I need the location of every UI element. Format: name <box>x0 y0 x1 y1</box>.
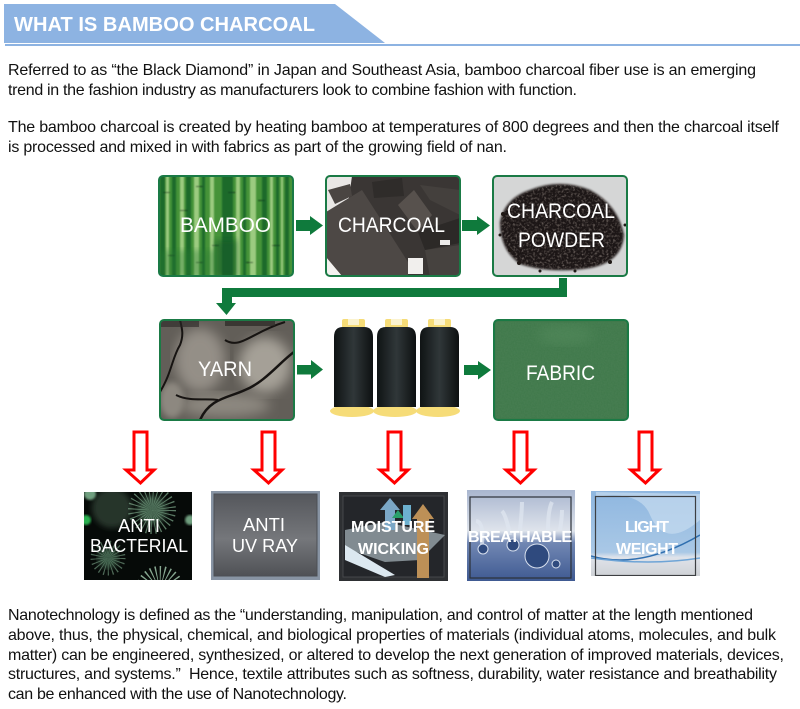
panel: anti uv ray <box>211 491 320 580</box>
panel: yarn <box>159 319 295 421</box>
label: light weight <box>616 519 678 558</box>
label: light weight: LIGHT <box>625 519 669 536</box>
label: anti uv ray <box>232 515 298 556</box>
intro paragraph two: is processed and mixed in with fabrics as part of the growing field of nan. <box>8 139 507 156</box>
intro paragraph one <box>8 62 756 99</box>
panel: anti bacterial <box>84 492 192 580</box>
closing paragraph: structures, and systems.” Hence, textile attributes such as softness, durability, water resistance and breathability <box>8 666 777 683</box>
panel: breathable <box>467 490 575 581</box>
label: moisture wicking: MOISTURE <box>351 519 435 536</box>
panel: charcoal <box>325 175 461 277</box>
intro paragraph one: Referred to as “the Black Diamond” in Japan and Southeast Asia, bamboo charcoal fiber use is an emerging <box>8 62 756 79</box>
arrow: red down arrows <box>126 432 659 483</box>
label: bamboo: BAMBOO <box>180 214 271 237</box>
closing paragraph: matter) can be engineered, synthesized, or altered to develop the next generation of improved materials, devices, <box>8 647 784 664</box>
panel: charcoal powder <box>492 175 628 277</box>
intro paragraph one: trend in the fashion industry as manufacturers look to combine fashion with function. <box>8 82 577 99</box>
title banner <box>4 4 800 46</box>
panel: moisture wicking <box>339 492 448 581</box>
closing paragraph: Nanotechnology is defined as the “understanding, manipulation, and control of matter at the length mentioned <box>8 607 753 624</box>
label: charcoal powder: POWDER <box>518 229 605 252</box>
panel: bamboo <box>158 175 294 277</box>
closing paragraph: above, thus, the physical, chemical, and biological properties of materials (individual atoms, molecules, and bulk <box>8 627 777 644</box>
label: charcoal: CHARCOAL <box>338 214 445 237</box>
panel: fabric <box>494 320 628 420</box>
label: moisture wicking: WICKING <box>358 541 429 558</box>
title: WHAT IS BAMBOO CHARCOAL <box>14 13 315 36</box>
label: fabric: FABRIC <box>526 362 595 385</box>
label: charcoal powder <box>507 200 615 252</box>
icon: thread spools <box>330 319 460 417</box>
label: anti bacterial <box>90 516 188 556</box>
arrow: yarn to spools <box>297 360 323 379</box>
panel: light weight <box>591 491 700 576</box>
label: light weight: WEIGHT <box>616 541 678 558</box>
arrow: powder to yarn connector <box>216 278 567 315</box>
label: yarn: YARN <box>198 358 252 381</box>
label: breathable: BREATHABLE <box>468 529 572 546</box>
label: anti uv ray: ANTI <box>243 515 285 535</box>
arrow: spools to fabric <box>464 361 491 380</box>
arrow: bamboo to charcoal <box>296 216 323 235</box>
closing paragraph: can be enhanced with the use of Nanotechnology. <box>8 686 347 703</box>
arrow: charcoal to powder <box>462 216 490 235</box>
intro paragraph two: The bamboo charcoal is created by heating bamboo at temperatures of 800 degrees and then the charcoal itself <box>8 119 780 136</box>
label: charcoal powder: CHARCOAL <box>507 200 615 223</box>
label: moisture wicking <box>351 519 435 558</box>
label: anti uv ray: UV RAY <box>232 536 298 556</box>
closing paragraph <box>8 607 784 703</box>
label: anti bacterial: BACTERIAL <box>90 536 188 556</box>
intro paragraph two <box>8 119 780 156</box>
label: anti bacterial: ANTI <box>118 516 160 536</box>
